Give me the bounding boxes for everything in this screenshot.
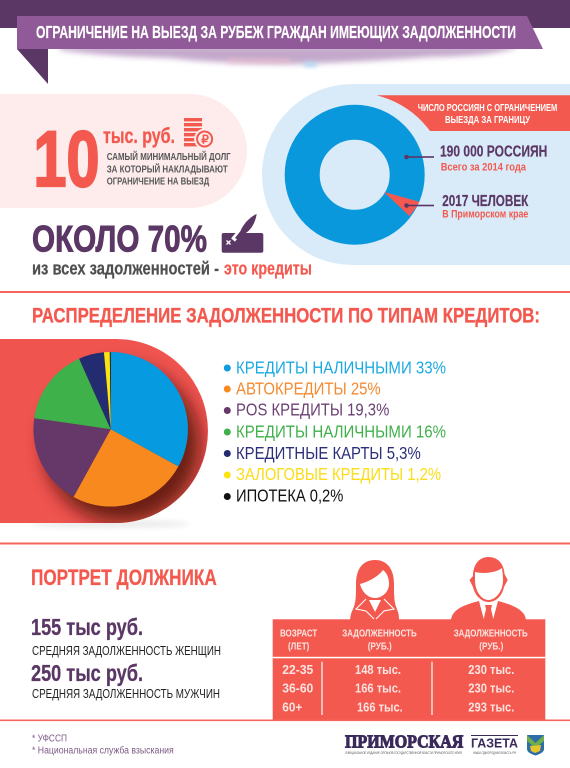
logo: ГАЗЕТА	[471, 736, 519, 751]
icon: coins	[184, 118, 215, 150]
table rows: 148 тыс.	[355, 662, 401, 677]
stat: women: 155 тыс руб.	[31, 614, 143, 640]
stat: men	[31, 660, 220, 701]
icon: man	[451, 557, 526, 620]
footnotes: * УФССП	[32, 734, 67, 745]
table rows: 36-60	[282, 681, 313, 696]
table header: ЗАДОЛЖЕННОСТЬ	[342, 628, 417, 640]
table header	[280, 628, 528, 652]
table rows: 230 тыс.	[468, 681, 514, 696]
pie	[33, 352, 188, 507]
stat caption: из всех задолженностей -	[32, 258, 219, 278]
table rows: 230 тыс.	[468, 662, 514, 677]
icon: woman	[350, 560, 399, 620]
table header: ЗАДОЛЖЕННОСТЬ	[454, 628, 528, 640]
table rows	[282, 662, 514, 714]
icon: coins: ₽	[201, 132, 209, 146]
stat: men: СРЕДНЯЯ ЗАДОЛЖЕННОСТЬ МУЖЧИН	[32, 687, 220, 701]
logo: ОФИЦИАЛЬНОЕ ИЗДАНИЕ ОРГАНОВ ГОСУДАРСТВЕННОЙ ВЛАСТИ ПРИМОРСКОГО КРАЯ	[345, 751, 462, 755]
logo: НАША ОДНОРОДНАЯ ВЛАСТЬ РФ	[473, 751, 516, 755]
big number 10: 10	[34, 114, 100, 203]
label: Primorye: 2017 ЧЕЛОВЕК	[442, 193, 529, 210]
stat: men: 250 тыс руб.	[31, 660, 143, 686]
footnotes: * Национальная служба взыскания	[32, 744, 174, 756]
table rows: 166 тыс.	[357, 699, 403, 714]
description	[107, 150, 231, 188]
legend item: mortgage: ИПОТЕКА 0,2%	[236, 486, 343, 506]
leader line: total	[404, 155, 434, 159]
leader line: Primorye	[404, 203, 434, 208]
table header: (ЛЕТ)	[288, 640, 309, 652]
legend item: secured: ЗАЛОГОВЫЕ КРЕДИТЫ 1,2%	[236, 464, 441, 484]
table header: (РУБ.)	[368, 640, 392, 652]
label: Primorye	[442, 193, 529, 220]
heading: debtor portrait: ПОРТРЕТ ДОЛЖНИКА	[31, 565, 217, 590]
stat: women: СРЕДНЯЯ ЗАДОЛЖЕННОСТЬ ЖЕНЩИН	[32, 644, 221, 658]
icon: signing quill	[222, 214, 263, 253]
icon: emblem	[527, 735, 544, 756]
banner: ВЫЕЗДА ЗА ГРАНИЦУ	[445, 114, 530, 126]
table	[273, 619, 545, 720]
table rows: 166 тыс.	[355, 681, 401, 696]
panel: minimum debt	[0, 94, 247, 208]
banner	[377, 95, 570, 131]
donut chart	[302, 122, 419, 227]
legend	[224, 357, 446, 506]
table rows: 22-35	[282, 662, 313, 677]
logo	[345, 732, 544, 756]
panel: number of Russians restricted	[262, 84, 570, 265]
panel: 70 percent: это кредиты	[224, 258, 312, 278]
logo: ПРИМОРСКАЯ	[345, 732, 463, 752]
legend item: car loans: АВТОКРЕДИТЫ 25%	[236, 378, 381, 398]
header ribbon	[0, 0, 570, 84]
footnotes	[32, 734, 174, 756]
table header: (РУБ.)	[479, 640, 503, 652]
table rows: 60+	[282, 699, 303, 714]
description: ЗА КОТОРЫЙ НАКЛАДЫВАЮТ	[107, 162, 228, 175]
label: Primorye: В Приморском крае	[442, 208, 528, 220]
label: total: Всего за 2014 года	[441, 161, 527, 173]
label: total	[440, 143, 547, 173]
legend item: POS: POS КРЕДИТЫ 19,3%	[236, 400, 389, 420]
table header: ВОЗРАСТ	[280, 628, 318, 640]
table rows: 293 тыс.	[468, 699, 514, 714]
panel: pie chart	[0, 339, 208, 528]
description: САМЫЙ МИНИМАЛЬНЫЙ ДОЛГ	[107, 150, 231, 163]
stat: women	[31, 614, 221, 658]
panel: 70 percent	[32, 214, 312, 278]
legend item: credit cards: КРЕДИТНЫЕ КАРТЫ 5,3%	[236, 443, 421, 463]
stat headline: ОКОЛО 70%	[32, 219, 207, 260]
legend item: cash: КРЕДИТЫ НАЛИЧНЫМИ 33%	[236, 357, 446, 377]
unit label: тыс. руб.	[103, 125, 175, 148]
legend item: cash 16: КРЕДИТЫ НАЛИЧНЫМИ 16%	[236, 421, 446, 441]
description: ОГРАНИЧЕНИЕ НА ВЫЕЗД	[107, 176, 210, 188]
